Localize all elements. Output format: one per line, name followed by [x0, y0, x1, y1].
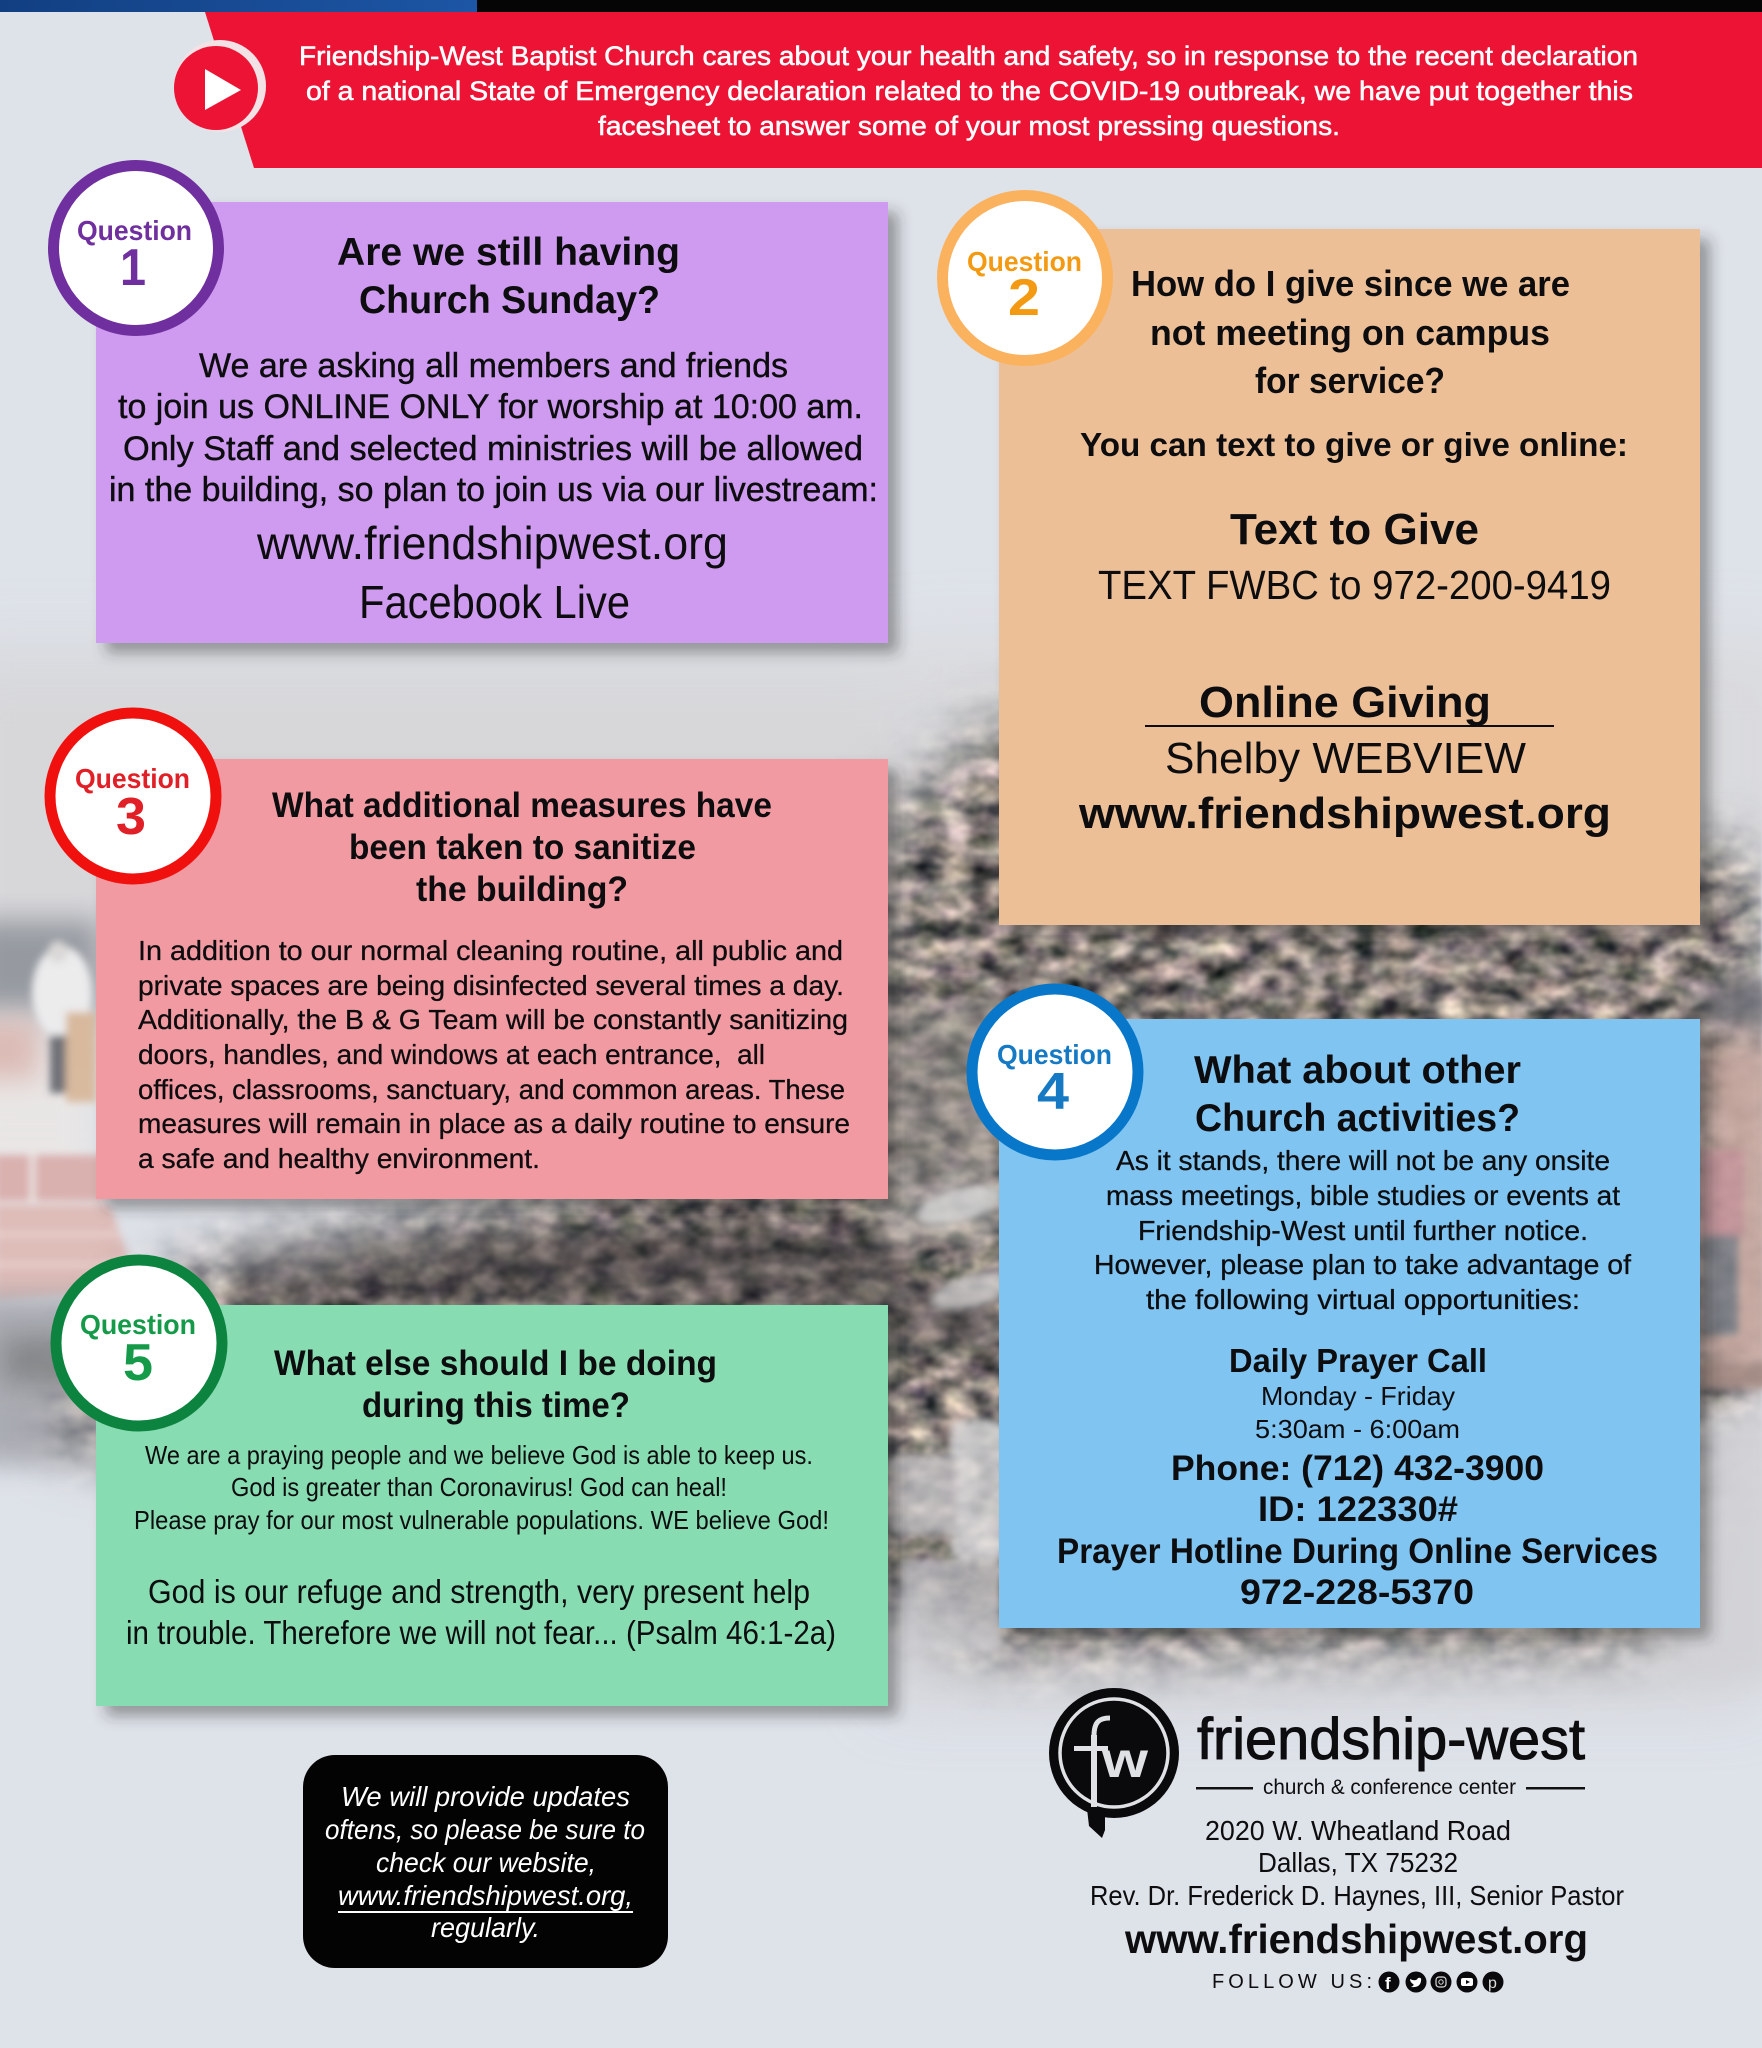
banner text: of a national State of Emergency declaration related to the COVID-19 outbreak, we have put together this	[306, 76, 1633, 106]
callout: updates: www.friendshipwest.org,	[338, 1880, 633, 1911]
top bar	[0, 0, 1762, 12]
answer: question 3: measures will remain in place as a daily routine to ensure	[138, 1108, 850, 1139]
text to give: TEXT FWBC to 972-200-9419	[1098, 562, 1611, 608]
follow us row	[1212, 1971, 1504, 1993]
badge: question 3: Question	[75, 763, 190, 794]
icon: pinterest	[1482, 1972, 1504, 1992]
icon: youtube	[1456, 1972, 1478, 1992]
background: right stage	[1690, 985, 1762, 1680]
heading: question 5	[274, 1344, 717, 1425]
prayer call details: Prayer Hotline During Online Services	[1057, 1532, 1658, 1571]
background: crowd photo	[40, 692, 1762, 1699]
panel: question 1	[54, 166, 888, 643]
heading: question 2: for service?	[1255, 360, 1445, 401]
badge: question 2	[942, 196, 1108, 360]
website: www.friendshipwest.org	[1124, 1916, 1588, 1962]
answer: question 1	[109, 347, 878, 509]
prayer call details: 5:30am - 6:00am	[1255, 1414, 1460, 1444]
scripture: question 5	[126, 1573, 836, 1651]
heading: question 5: What else should I be doing	[274, 1344, 717, 1383]
online giving: www.friendshipwest.org	[1078, 789, 1611, 838]
banner text	[299, 41, 1638, 141]
answer: question 1: to join us ONLINE ONLY for worship at 10:00 am.	[118, 388, 863, 426]
prayer call details: ID: 122330#	[1258, 1490, 1458, 1529]
address block: 2020 W. Wheatland Road	[1205, 1815, 1511, 1846]
heading: question 3: the building?	[416, 870, 628, 909]
badge: question 2: Question	[967, 246, 1082, 277]
badge: question 1	[54, 166, 218, 330]
heading: question 3	[272, 786, 772, 909]
panel: question 4	[972, 989, 1700, 1628]
badge: question 4	[972, 989, 1138, 1155]
badge: question 5: 5	[123, 1334, 153, 1392]
callout: updates: check our website,	[376, 1847, 596, 1878]
answer: question 4	[1094, 1145, 1631, 1315]
background: stage left	[0, 920, 140, 1465]
heading: question 3: been taken to sanitize	[349, 828, 696, 867]
online giving: Shelby WEBVIEW	[1165, 734, 1526, 783]
panel: question 3	[50, 713, 888, 1199]
online giving	[1078, 678, 1611, 838]
scripture: question 5: God is our refuge and strength, very present help	[148, 1573, 810, 1610]
badge: question 1: Question	[77, 215, 192, 246]
answer: question 4: mass meetings, bible studies or events at	[1106, 1180, 1620, 1211]
address block: Dallas, TX 75232	[1258, 1847, 1458, 1878]
links: question 1	[256, 517, 728, 628]
address block: Rev. Dr. Frederick D. Haynes, III, Senior Pastor	[1090, 1880, 1624, 1911]
callout: updates: We will provide updates	[341, 1781, 630, 1812]
icon: fw mark	[1049, 1688, 1179, 1838]
badge: question 1: 1	[120, 239, 146, 297]
badge: question 3	[50, 713, 216, 879]
answer: question 3: doors, handles, and windows at each entrance, all	[138, 1039, 765, 1070]
answer: question 3	[138, 935, 850, 1174]
heading: question 1: Are we still having	[337, 231, 680, 274]
badge: question 5	[56, 1260, 222, 1426]
prayer call details: 972-228-5370	[1240, 1573, 1474, 1612]
panel: question 2	[942, 196, 1700, 925]
tagline: church & conference center	[1263, 1776, 1516, 1799]
prayer call details	[1057, 1342, 1658, 1612]
heading: question 2: How do I give since we are	[1131, 263, 1570, 304]
answer: question 1: in the building, so plan to join us via our livestream:	[109, 471, 878, 509]
answer: question 5: God is greater than Coronavirus! God can heal!	[231, 1472, 727, 1502]
heading: question 3: What additional measures have	[272, 786, 772, 825]
prayer call details: Daily Prayer Call	[1229, 1342, 1487, 1379]
banner: intro	[174, 12, 1762, 168]
links: question 1: Facebook Live	[359, 576, 630, 628]
prayer call details: Monday - Friday	[1261, 1381, 1455, 1411]
answer: question 5: We are a praying people and we believe God is able to keep us.	[145, 1440, 813, 1470]
online giving: Online Giving	[1199, 678, 1491, 727]
callout: updates: oftens, so please be sure to	[325, 1814, 645, 1845]
panel: question 5	[56, 1260, 888, 1706]
heading: question 4: Church activities?	[1195, 1097, 1520, 1140]
heading: question 2	[1131, 263, 1570, 401]
prayer call details: Phone: (712) 432-3900	[1171, 1449, 1544, 1488]
answer: question 3: Additionally, the B & G Team will be constantly sanitizing	[138, 1004, 848, 1035]
answer: question 4: Friendship-West until further notice.	[1138, 1215, 1588, 1246]
banner text: facesheet to answer some of your most pressing questions.	[598, 111, 1340, 141]
scripture: question 5: in trouble. Therefore we will not fear... (Psalm 46:1-2a)	[126, 1614, 836, 1651]
icon: play button	[174, 40, 266, 132]
background: wall haze	[0, 640, 1762, 1700]
heading: question 4: What about other	[1194, 1049, 1521, 1092]
wordmark: friendship-west	[1197, 1707, 1585, 1772]
links: question 1: www.friendshipwest.org	[256, 517, 728, 569]
icon: pinterest: p	[1488, 1975, 1497, 1992]
text to give	[1098, 505, 1611, 608]
answer: question 4: the following virtual opportunities:	[1146, 1284, 1580, 1315]
badge: question 3: 3	[116, 788, 146, 846]
icon: instagram	[1430, 1972, 1452, 1992]
text to give: Text to Give	[1230, 505, 1479, 554]
badge: question 4: Question	[997, 1039, 1112, 1070]
icon: twitter	[1406, 1972, 1426, 1992]
follow us row: FOLLOW US:	[1212, 1971, 1372, 1993]
heading: question 4	[1194, 1049, 1521, 1140]
answer: question 1: Only Staff and selected ministries will be allowed	[123, 430, 863, 468]
heading: question 5: during this time?	[362, 1386, 630, 1425]
subheading: question 2: You can text to give or give online:	[1080, 426, 1628, 463]
icon: fw mark: w	[1101, 1732, 1148, 1788]
answer: question 4: As it stands, there will not be any onsite	[1116, 1145, 1610, 1176]
answer: question 3: private spaces are being disinfected several times a day.	[138, 970, 844, 1001]
callout: updates: regularly.	[431, 1912, 540, 1943]
answer: question 1: We are asking all members and friends	[199, 347, 788, 385]
heading: question 2: not meeting on campus	[1150, 312, 1550, 353]
badge: question 2: 2	[1008, 269, 1040, 327]
icon: facebook: f	[1385, 1974, 1391, 1993]
answer: question 3: In addition to our normal cleaning routine, all public and	[138, 935, 843, 966]
answer: question 3: a safe and healthy environment.	[138, 1143, 540, 1174]
answer: question 5	[134, 1440, 829, 1535]
address block	[1090, 1815, 1624, 1911]
heading: question 1: Church Sunday?	[359, 279, 660, 322]
heading: question 1	[337, 231, 680, 322]
badge: question 4: 4	[1037, 1063, 1069, 1121]
answer: question 5: Please pray for our most vulnerable populations. WE believe God!	[134, 1505, 829, 1535]
badge: question 5: Question	[80, 1309, 196, 1340]
callout: updates	[303, 1755, 668, 1968]
icon: facebook	[1378, 1972, 1400, 1993]
banner text: Friendship-West Baptist Church cares about your health and safety, so in response to the recent declaration	[299, 41, 1638, 71]
answer: question 4: However, please plan to take advantage of	[1094, 1249, 1631, 1280]
logo: friendship-west	[1049, 1688, 1585, 1838]
answer: question 3: offices, classrooms, sanctuary, and common areas. These	[138, 1074, 845, 1105]
